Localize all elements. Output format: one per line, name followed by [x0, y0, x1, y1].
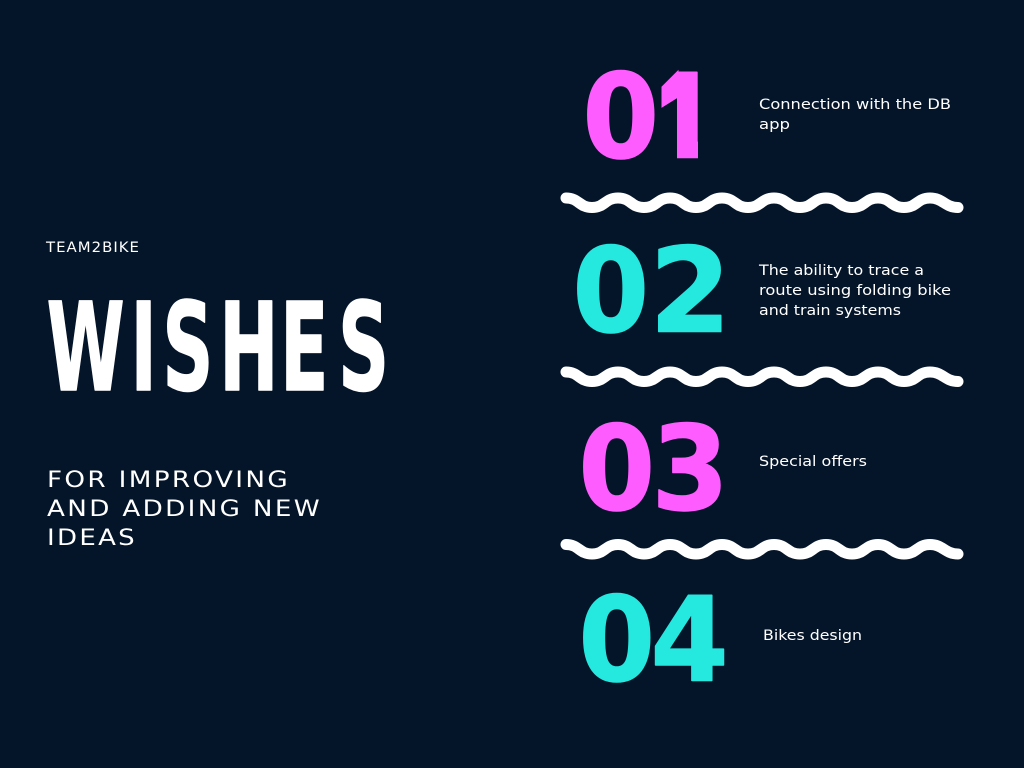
brand label: TEAM2BIKE: [45, 240, 140, 256]
number 04: [578, 572, 729, 709]
number 02: 0: [572, 223, 649, 359]
subtitle: IDEAS: [47, 525, 137, 551]
title: WISHES: WISHES: [47, 276, 389, 419]
description 03: Special offers: [759, 454, 867, 470]
number 04: 0: [578, 572, 655, 708]
item 03: [578, 401, 867, 537]
number 02: 2: [650, 222, 731, 360]
wavy divider 2: [566, 372, 958, 382]
item 04: [578, 572, 862, 709]
description 04: Bikes design: [763, 628, 862, 644]
number 01: 0: [582, 49, 659, 185]
number 04: 4: [650, 573, 729, 709]
subtitle: [47, 467, 322, 551]
description 02: The ability to trace a: [758, 263, 924, 279]
wavy divider 1: [566, 198, 958, 208]
description 02: [758, 263, 951, 319]
number 01: [582, 48, 724, 186]
description 02: route using folding bike: [759, 283, 951, 299]
number 03: 0: [578, 401, 655, 537]
description 02: and train systems: [759, 303, 901, 319]
wavy divider 3: [566, 544, 958, 554]
number 03: 3: [652, 401, 729, 537]
description 01: app: [759, 117, 790, 133]
description 01: [759, 97, 951, 133]
subtitle: AND ADDING NEW: [47, 496, 322, 522]
number 03: [578, 401, 729, 537]
item 02: [572, 222, 951, 360]
subtitle: FOR IMPROVING: [47, 467, 290, 493]
description 01: Connection with the DB: [759, 97, 951, 113]
number 01: 1: [643, 48, 724, 186]
number 02: [572, 222, 731, 360]
item 01: [582, 48, 951, 186]
